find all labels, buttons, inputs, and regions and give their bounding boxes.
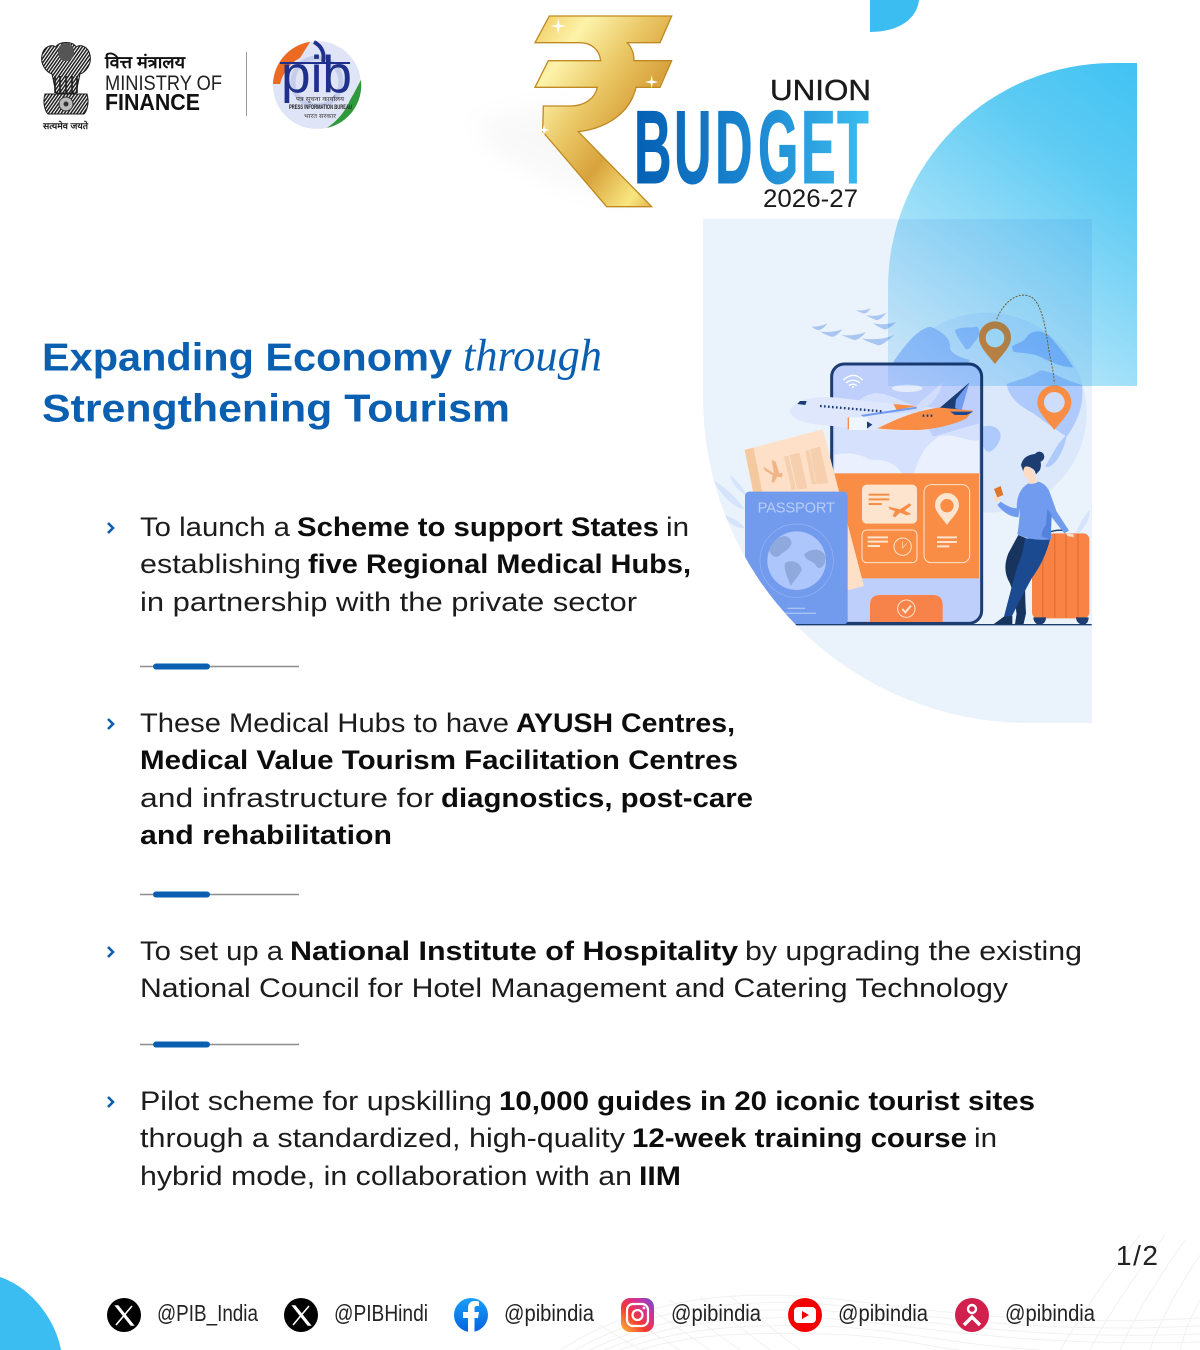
bullet point 4: 12-week training course — [632, 1123, 967, 1153]
traveller — [993, 452, 1074, 625]
bullet point 4: through a standardized, high-quality — [140, 1123, 626, 1153]
pin upper — [979, 321, 1011, 364]
social: X PIBHindi — [284, 1298, 428, 1332]
social: X PIB_India — [107, 1298, 258, 1332]
divider 3 — [140, 1042, 299, 1048]
logo: national emblem with motto — [42, 42, 90, 131]
bullet point 1: To launch a — [140, 512, 291, 542]
faint leaves — [713, 475, 1090, 537]
title — [42, 330, 602, 430]
social: youtube: @pibindia — [838, 1300, 928, 1326]
logo: national emblem with motto: सत्यमेव जयते — [42, 120, 89, 131]
bullet point 3: National Institute of Hospitality — [290, 936, 738, 966]
bullet point 3 — [108, 936, 1082, 1003]
logo: gold rupee symbol — [475, 16, 672, 207]
airplane — [789, 382, 973, 431]
passport — [745, 492, 848, 624]
phone — [832, 364, 982, 623]
logo: press information bureau: pib — [281, 46, 352, 104]
suitcase — [1032, 530, 1089, 625]
divider 2 — [140, 892, 299, 898]
bullet point 2: AYUSH Centres, — [516, 708, 735, 738]
location route — [997, 295, 1054, 383]
pin lower — [1037, 385, 1071, 430]
passport: PASSPORT — [758, 500, 835, 516]
bullet point 1: establishing — [140, 549, 301, 579]
title: Strengthening Tourism — [42, 388, 510, 430]
bullet point 1: in partnership with the private sector — [140, 587, 637, 617]
logo: union budget 2026-27 wordmark: 2026-27 — [763, 185, 858, 213]
logo: press information bureau — [273, 41, 361, 129]
orange app band — [834, 473, 979, 578]
social: facebook: @pibindia — [504, 1300, 594, 1326]
confirm button — [870, 595, 943, 622]
wifi — [843, 375, 863, 386]
bullet point 4: in — [974, 1123, 997, 1153]
bullet point 2: These Medical Hubs to have — [140, 708, 509, 738]
top decorative cyan tab — [870, 0, 919, 32]
logo: ministry of finance wordmark: MINISTRY OF — [105, 72, 222, 95]
clouds — [834, 385, 979, 473]
bullet point 4: Pilot scheme for upskilling — [140, 1086, 492, 1116]
bullet point 2: Medical Value Tourism Facilitation Centres — [140, 745, 738, 775]
logo: press information bureau: PRESS INFORMATION BUREAU — [289, 105, 352, 111]
social: koo — [955, 1298, 1095, 1332]
bullet point 1 — [108, 512, 691, 617]
bullet point 1: Scheme to support States — [297, 512, 659, 542]
ticket card — [862, 485, 917, 524]
panel: pale blue illustration backdrop — [703, 219, 1092, 723]
background pattern: faint wave lines — [560, 1235, 1200, 1350]
map card — [924, 485, 970, 563]
divider 1 — [140, 664, 299, 670]
social: X PIBHindi: @PIBHindi — [334, 1300, 428, 1326]
bullet point 4: IIM — [639, 1161, 681, 1191]
bullet point 1: in — [666, 512, 689, 542]
birds — [812, 308, 896, 345]
time card — [862, 530, 917, 563]
bullet point 2: and rehabilitation — [140, 820, 392, 850]
social: X PIB_India: @PIB_India — [157, 1300, 258, 1326]
bullet point 2: diagnostics, post-care — [441, 783, 753, 813]
bullet point 3: by upgrading the existing — [745, 936, 1082, 966]
page number: 1/2 — [1116, 1240, 1158, 1271]
title: Expanding Economy — [42, 336, 452, 380]
ground line — [795, 624, 1092, 626]
bullet point 4: hybrid mode, in collaboration with an — [140, 1161, 632, 1191]
illustration: travel phone, passport and traveller — [713, 295, 1092, 625]
logo: press information bureau: भारत सरकार — [304, 114, 337, 120]
bottom-left cyan quarter circle — [0, 1277, 61, 1350]
logo: union budget 2026-27 wordmark: BUDGET — [634, 91, 869, 206]
logo: union budget 2026-27 wordmark: UNION — [770, 75, 871, 107]
bullet point 4: 10,000 guides in 20 iconic tourist sites — [499, 1086, 1035, 1116]
cyan gradient overlay panel — [888, 63, 1137, 386]
logo: ministry of finance wordmark: वित्त मंत्रालय — [104, 52, 186, 72]
title: through — [463, 330, 602, 380]
bullet point 3: To set up a — [140, 936, 284, 966]
logo: press information bureau: पत्र सूचना कार्यालय — [296, 95, 345, 103]
social: koo: @pibindia — [1005, 1300, 1095, 1326]
logo: ministry of finance wordmark — [104, 52, 222, 115]
social: instagram: @pibindia — [671, 1300, 761, 1326]
boarding pass — [745, 429, 864, 607]
bullet point 2: and infrastructure for — [140, 783, 434, 813]
social: youtube — [788, 1298, 928, 1332]
bullet point 4 — [108, 1086, 1035, 1191]
social: instagram — [621, 1298, 761, 1332]
logo: ministry of finance wordmark: FINANCE — [105, 89, 200, 115]
bullet point 2 — [108, 708, 753, 850]
globe — [887, 313, 1087, 513]
social: facebook — [454, 1298, 594, 1332]
bullet point 1: five Regional Medical Hubs, — [308, 549, 691, 579]
bullet point 3: National Council for Hotel Management and Catering Technology — [140, 973, 1009, 1003]
